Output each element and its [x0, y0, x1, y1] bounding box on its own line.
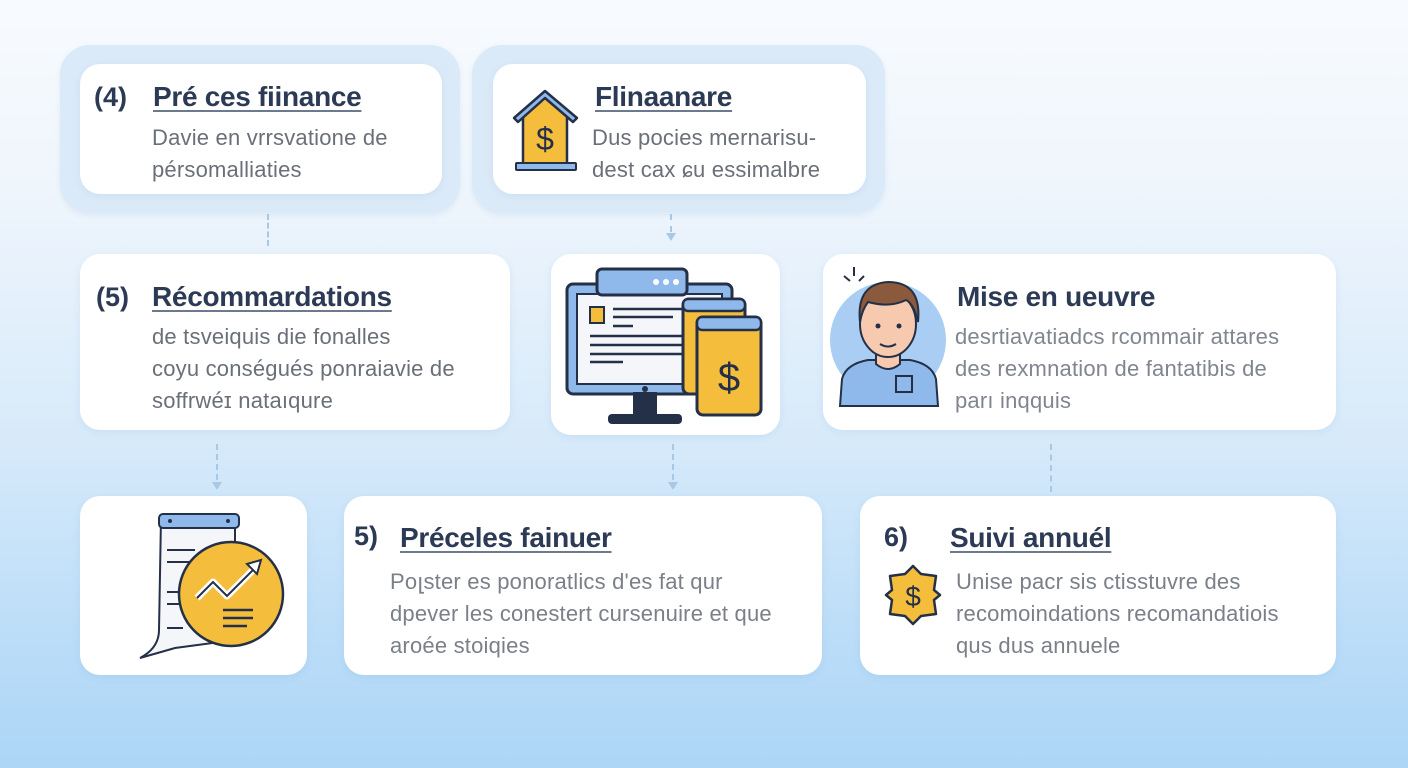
icon: person avatar [830, 267, 946, 407]
arrow: connector 3 [212, 444, 222, 490]
heading: Récommardations [152, 281, 392, 312]
body text: soffrwéɪ nataıqure [152, 388, 333, 413]
body text: Dus pocies mernarisu- [592, 125, 816, 150]
heading: Suivi annuél [950, 522, 1111, 553]
number 4: (4) [94, 82, 127, 112]
body text: qus dus annuele [956, 633, 1120, 658]
icon: document with growth coin [140, 513, 284, 659]
body text [956, 569, 1279, 658]
arrow: connector 1 [267, 214, 269, 246]
body text: Poլster es ponoratlics d'es fat qur [390, 569, 723, 594]
arrow: connector 5 [1050, 444, 1052, 492]
body text: parı inqquis [955, 388, 1071, 413]
icon: monitor with devices [566, 268, 762, 424]
icon: house dollar [512, 90, 578, 171]
heading: Flinaanare: Flinaanare [595, 81, 732, 112]
icon: monitor with devices: $ [718, 356, 740, 400]
arrow: connector 2 [666, 214, 676, 241]
body text: de tsveiquis die fonalles [152, 324, 391, 349]
body text: aroée stoiqies [390, 633, 530, 658]
body text: Unise pacr sis ctisstuvre des [956, 569, 1241, 594]
panel: report icon card [80, 496, 307, 675]
heading: Pré ces finance: Pré ces fiinance [153, 81, 361, 112]
heading: Préceles fainuer [400, 522, 612, 553]
number 5: (5) [96, 282, 129, 312]
body text [592, 125, 820, 182]
body text [390, 569, 772, 658]
body text: des rexmnation de fantatibis de [955, 356, 1267, 381]
body text: coyu conségués ponraiavie de [152, 356, 455, 381]
icon: dollar badge: $ [905, 581, 921, 612]
heading: Mise en ueuvre [957, 281, 1155, 312]
arrow: connector 4 [668, 444, 678, 490]
panel: Flinaanare [472, 45, 885, 213]
body text: Davie en vrrsvatione de [152, 125, 388, 150]
icon: dollar badge [884, 564, 942, 626]
icon: house dollar: $ [536, 121, 554, 157]
panel: step 5 Préceles [344, 496, 822, 675]
body text: pérsomalliaties [152, 157, 302, 182]
body text: recomoindations recomandatiois [956, 601, 1279, 626]
number: 5) [354, 521, 378, 551]
panel: Mise en oeuvre [823, 254, 1336, 430]
body text: dpever les conestert cursenuire et que [390, 601, 772, 626]
body text [152, 125, 388, 182]
body text [955, 324, 1279, 413]
panel: step 5 recommandations [80, 254, 510, 430]
body text: desrtiavatiadcs rcommair attares [955, 324, 1279, 349]
body text [152, 324, 455, 413]
panel: step 4 finance [60, 45, 460, 213]
number: 6) [884, 522, 908, 552]
panel: step 6 suivi annuel [860, 496, 1336, 675]
panel: computer icon card [551, 254, 780, 435]
body text: dest cax ɕu essimalbre [592, 157, 820, 182]
